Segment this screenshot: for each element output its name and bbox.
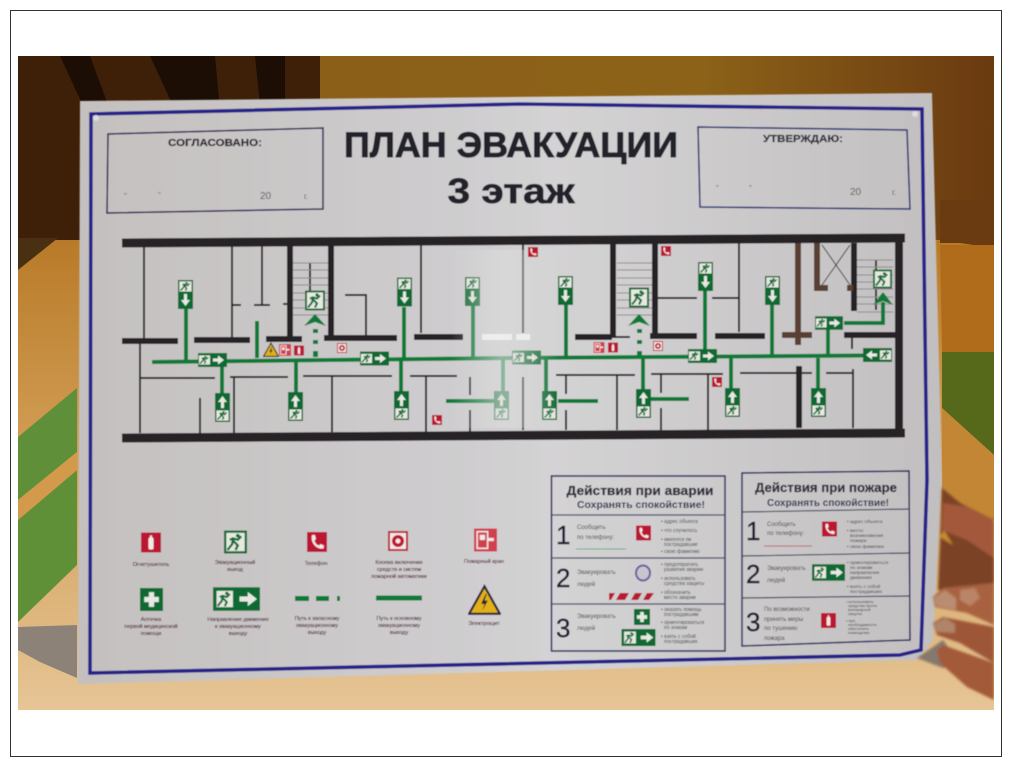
fire step 3: средства проти-: [848, 603, 879, 608]
legend: electrical panel: [468, 586, 500, 627]
approval box: agreed: СОГЛАСОВАНО:: [168, 138, 262, 149]
fire step 1: пожара: [850, 539, 867, 544]
legend: evacuation exit: [215, 530, 255, 573]
fire heading: Действия при пожаре: [755, 480, 897, 495]
legend: first aid: помощи: [141, 631, 161, 637]
inner walls: [122, 243, 897, 433]
accident step 1: пострадавшие: [664, 542, 698, 548]
accident step 3: пострадавшим: [664, 612, 699, 618]
fire step 1: возникновения: [850, 534, 884, 539]
accident step 3: • взять с собой: [661, 633, 696, 640]
hand holding the board: [917, 488, 994, 700]
approval box: approved: 20: [850, 187, 862, 198]
mounting holes: [93, 111, 918, 121]
legend: extinguisher: [133, 532, 169, 568]
legend: direction of movement: выходу: [229, 631, 247, 637]
green evacuation routes: [152, 291, 883, 401]
accident step 1: по телефону:: [577, 535, 614, 541]
accident step 2: Эвакуировать: [577, 570, 616, 576]
fire step 3: принять меры: [764, 617, 803, 623]
accident step 1: 1: [556, 520, 570, 550]
legend: electrical panel: Электрощит: [468, 621, 500, 627]
accident step 2: средства защиты: [664, 581, 705, 587]
fire safety icons on plan: [264, 246, 722, 425]
fire subheading: Сохранять спокойствие!: [767, 498, 889, 509]
main title: ПЛАН ЭВАКУАЦИИ: [344, 126, 678, 165]
approval box: agreed: 20: [260, 191, 272, 202]
fire step 3: обесточить: [848, 626, 869, 631]
fire step 2: • ориентироваться: [847, 561, 889, 566]
fire step 3: помещение: [848, 630, 870, 635]
legend: first aid: Аптечка: [141, 617, 162, 623]
outer walls: [122, 238, 905, 438]
fire step 1: Сообщить: [767, 522, 796, 528]
fire step 3: по тушению: [764, 626, 798, 632]
legend: alarm button: Кнопка включения: [375, 560, 423, 566]
fire step 3: защиты: [848, 611, 862, 616]
fire step 1: • место: [847, 529, 864, 534]
fire step 2: Эвакуировать: [767, 566, 806, 572]
accident step 1: [556, 519, 700, 555]
accident step 1: • что случилось: [661, 528, 698, 534]
reflection on corridor wall: [482, 334, 530, 340]
legend: alarm button: пожарной автоматики: [371, 573, 427, 580]
legend: direction of movement: [208, 587, 268, 637]
legend: direction of movement: Направление движения: [208, 617, 268, 623]
panel: actions in an accident: [552, 476, 725, 651]
approval box: agreed: ": [124, 192, 127, 201]
staircases and lift shaft: [293, 245, 893, 315]
fire step 3: [746, 599, 879, 642]
fire step 2: пострадавших: [850, 590, 883, 595]
accident step 3: пострадавших: [664, 639, 698, 645]
accident subheading: Сохранять спокойствие!: [577, 500, 705, 511]
fire step 1: по телефону:: [767, 531, 804, 537]
accident step 3: 3: [556, 613, 570, 643]
accident step 3: по знакам: [664, 625, 688, 631]
approval box: agreed: ": [158, 191, 161, 200]
accident step 2: 2: [556, 563, 570, 593]
accident heading: Действия при аварии: [566, 483, 714, 498]
panel: actions in a fire: [742, 471, 910, 646]
fire step 2: по знакам: [850, 566, 872, 571]
approval box: approved: УТВЕРЖДАЮ:: [763, 134, 843, 145]
approval box: agreed: [107, 128, 323, 213]
accident step 2: развитие аварии: [664, 567, 703, 573]
fire step 1: • адрес объекта: [847, 519, 883, 525]
approval box: approved: г.: [892, 188, 896, 197]
approval box: approved: ": [749, 184, 752, 193]
floor subtitle: 3 этаж: [448, 172, 576, 211]
legend: [124, 528, 504, 637]
blue board border: [90, 104, 927, 673]
fire step 3: По возможности: [764, 607, 810, 613]
legend: first aid: первой медицинской: [124, 623, 178, 630]
fire step 2: 2: [746, 559, 760, 589]
accident step 3: • ориентироваться: [661, 620, 704, 626]
accident step 2: [556, 562, 705, 601]
legend: first aid: [124, 588, 178, 637]
fire step 2: [746, 559, 889, 595]
fire step 3: 3: [746, 607, 760, 637]
evacuation direction signs: [178, 262, 892, 422]
fire step 1: 1: [746, 516, 760, 546]
accident step 1: Сообщить: [577, 525, 606, 531]
legend: telephone: Телефон: [305, 561, 327, 567]
legend: main exit path: Путь к основному: [376, 616, 422, 622]
legend: reserve exit path: эвакуационному: [296, 623, 338, 629]
legend: reserve exit path: выходу: [308, 630, 326, 636]
accident step 3: [556, 607, 704, 646]
accident step 2: • обозначить: [661, 590, 691, 596]
fire step 2: • взять с собой: [847, 583, 881, 590]
fire step 3: • использовать: [846, 599, 874, 604]
fire step 2: направления: [850, 571, 879, 576]
legend: fire hydrant: [464, 528, 504, 565]
accident step 1: • имеются ли: [661, 537, 692, 543]
legend: reserve exit path: [295, 598, 340, 636]
fire step 3: необходимости: [848, 622, 877, 627]
legend: main exit path: выходу: [390, 630, 408, 636]
legend: alarm button: средств и систем: [377, 567, 421, 573]
fire step 3: пожара: [764, 636, 785, 642]
accident step 3: • оказать помощь: [661, 607, 702, 613]
fire step 3: вопожарной: [848, 607, 870, 612]
floor plan: [122, 238, 905, 438]
legend: main exit path: эвакуационному: [378, 623, 420, 629]
evacuation plan board: [78, 93, 942, 684]
fire step 2: движения: [850, 576, 872, 581]
fire step 2: людей: [767, 577, 785, 584]
legend: extinguisher: Огнетушитель: [133, 562, 169, 568]
accident step 2: место аварии: [664, 595, 696, 601]
accident step 3: Эвакуировать: [577, 614, 616, 620]
legend: evacuation exit: выход: [227, 567, 244, 573]
approval box: approved: [698, 127, 910, 209]
fire step 3: • при: [846, 618, 855, 623]
legend: evacuation exit: Эвакуационный: [215, 559, 255, 566]
fire step 1: [746, 516, 885, 550]
glare across centre fold: [450, 250, 560, 428]
legend: telephone: [305, 532, 327, 567]
legend: reserve exit path: Путь к запасному: [295, 616, 340, 622]
legend: main exit path: [376, 598, 422, 636]
legend: direction of movement: к эвакуационному: [215, 624, 261, 630]
accident step 2: • использовать: [661, 576, 696, 582]
reserve exit dashed routes: [304, 292, 893, 357]
legend: fire hydrant: Пожарный кран: [464, 558, 504, 565]
accident step 1: • свою фамилию: [661, 549, 700, 555]
accident step 2: • предотвратить: [661, 562, 699, 568]
accident step 2: людей: [577, 581, 595, 588]
accident step 1: • адрес объекта: [661, 519, 698, 525]
approval box: agreed: г.: [304, 192, 308, 201]
approval box: approved: ": [716, 184, 719, 193]
fire step 1: • свою фамилию: [847, 544, 885, 550]
legend: alarm button: [371, 531, 427, 580]
accident step 3: людей: [577, 625, 595, 632]
